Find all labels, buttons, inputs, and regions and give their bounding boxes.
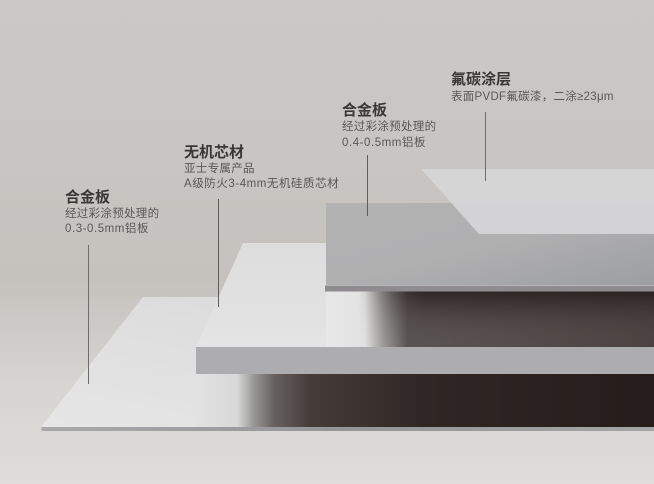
description: 经过彩涂预处理的 (65, 206, 159, 220)
bottom sheet front edge (42, 427, 654, 431)
leader line: core board (218, 199, 219, 307)
description: A级防火3-4mm无机硅质芯材 (184, 176, 339, 190)
label: bottom alloy sheet (65, 188, 159, 235)
description: 亚士专属产品 (184, 161, 255, 175)
heading: 合金板 (342, 101, 387, 119)
panel: bottom alloy sheet (41, 297, 654, 427)
core board front face (196, 347, 654, 374)
leader line: coating (485, 112, 486, 181)
shadow under upper sheet (362, 292, 654, 347)
upper sheet front edge (325, 286, 654, 292)
upper sheet top surface (326, 203, 654, 285)
panel: inorganic core board (196, 243, 654, 374)
panel: upper alloy sheet (325, 203, 654, 292)
leader line: upper alloy sheet (367, 155, 368, 216)
heading: 合金板 (65, 188, 110, 206)
label: PVDF coating (451, 70, 614, 103)
bottom sheet top surface (41, 297, 654, 427)
description: 经过彩涂预处理的 (342, 119, 436, 133)
label: core board (184, 143, 339, 190)
core board top surface (196, 243, 654, 347)
shadow under core board (196, 374, 654, 427)
heading: 氟碳涂层 (451, 70, 511, 88)
heading: 无机芯材 (184, 143, 244, 161)
description: 0.4-0.5mm铝板 (342, 135, 426, 149)
panel: PVDF coating layer (421, 169, 654, 234)
leader line: bottom alloy sheet (88, 245, 89, 384)
label: upper alloy sheet (342, 101, 436, 149)
description: 表面PVDF氟碳漆，二涂≥23μm (451, 89, 614, 103)
description: 0.3-0.5mm铝板 (65, 221, 149, 235)
